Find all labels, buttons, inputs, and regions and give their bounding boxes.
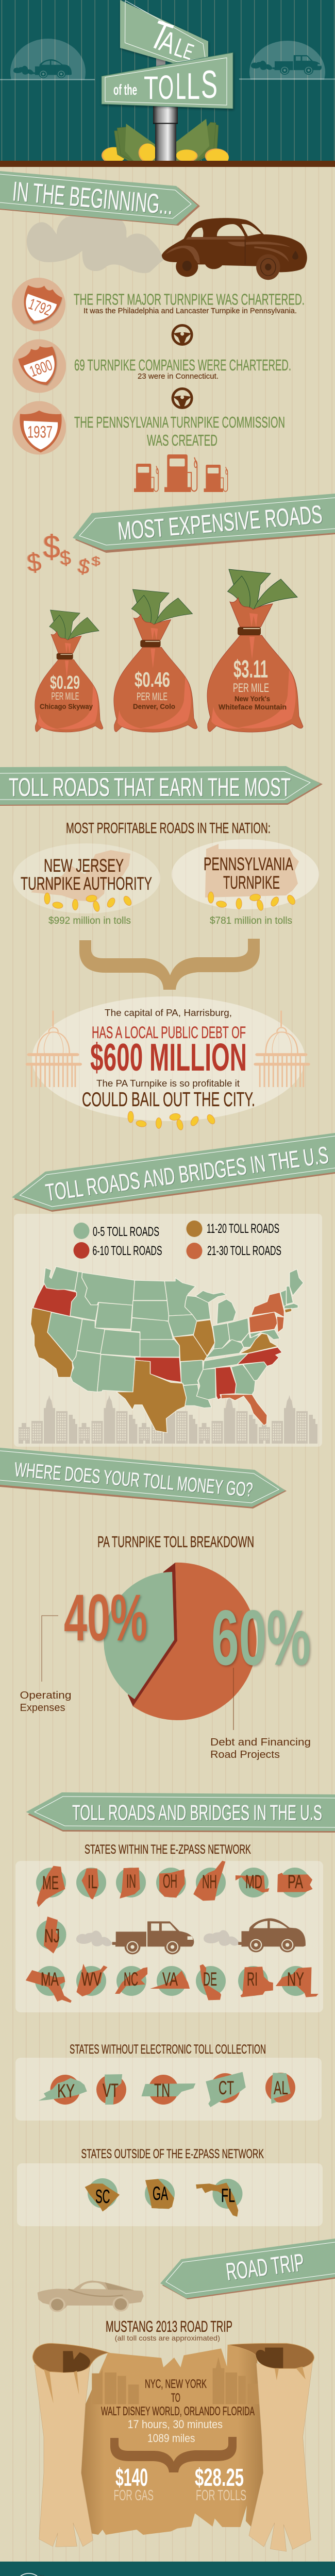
money bag: Chicago Skyway: Chicago Skyway bbox=[40, 702, 93, 710]
cost: gas: $140 bbox=[115, 2464, 148, 2492]
money bag: Denver: Denver, Colo bbox=[133, 702, 175, 710]
header panel bbox=[0, 0, 335, 166]
state labels: ME bbox=[42, 1872, 59, 1893]
icon: dollar signs: $ bbox=[26, 547, 43, 578]
state labels: PA bbox=[288, 1871, 303, 1892]
money bag: Whiteface Mountain: New York's bbox=[234, 694, 270, 703]
panel: outside states: GA bbox=[153, 2183, 168, 2204]
scroll text: route: TO bbox=[171, 2391, 180, 2405]
state labels: NH bbox=[202, 1871, 217, 1892]
icon: highway shield 1937 bbox=[12, 401, 66, 454]
icon: dollar signs: $ bbox=[92, 554, 100, 569]
icon: highway shield 1937: 1937 bbox=[27, 423, 53, 442]
panel: Harrisburg debt: The capital of PA, Harrisburg, bbox=[105, 1007, 232, 1018]
pie slice edge bbox=[128, 1563, 177, 1706]
icon: dollar signs: $ bbox=[43, 529, 60, 565]
icon: vintage brown car bbox=[162, 218, 307, 280]
scroll bbox=[32, 2343, 314, 2551]
banner: in the beginning: IN THE BEGINNING... bbox=[11, 176, 174, 221]
pie chart bbox=[20, 1563, 311, 1760]
leader: operating expenses bbox=[42, 1616, 58, 1682]
footer bbox=[0, 2562, 335, 2576]
street sign: of the TOLLS: T bbox=[144, 70, 158, 106]
cost: gas: FOR GAS bbox=[113, 2487, 154, 2504]
banner: road trip bbox=[160, 2239, 335, 2299]
icon: Pennsylvania map bbox=[205, 844, 299, 897]
state shapes bbox=[26, 1861, 319, 2003]
scroll text: route bbox=[101, 2377, 255, 2418]
label: operating expenses: Operating bbox=[20, 1690, 71, 1701]
scroll text: distance: 1089 miles bbox=[147, 2432, 195, 2445]
banner: toll roads that earn the most bbox=[0, 766, 323, 806]
money bag: Whiteface Mountain bbox=[207, 569, 303, 732]
fact detail: It was the Philadelphia and Lancaster Turnpike in Pennsylvania. bbox=[83, 307, 297, 315]
icon: gas pumps bbox=[134, 454, 228, 492]
map: United States bbox=[30, 1266, 304, 1433]
panel: Harrisburg debt bbox=[27, 996, 308, 1131]
panel: New Jersey Turnpike Authority: $992 million in tolls bbox=[48, 916, 131, 926]
street sign: TALE: E bbox=[180, 39, 196, 65]
label: debt and financing: Road Projects bbox=[210, 1749, 280, 1760]
icon: highway shield 1800 bbox=[12, 339, 66, 393]
street sign: of the TOLLS: O bbox=[158, 68, 174, 106]
panel: Pennsylvania Turnpike bbox=[172, 839, 319, 926]
icon: capitol right bbox=[256, 1011, 308, 1087]
state labels: NC bbox=[124, 1969, 138, 1990]
street sign: TALE bbox=[120, 0, 208, 65]
street sign: of the TOLLS: S bbox=[201, 63, 217, 107]
icon: brace bbox=[110, 2437, 237, 2472]
label: operating expenses bbox=[20, 1690, 71, 1714]
money bag: Chicago Skyway: PER MILE bbox=[52, 691, 79, 702]
state labels: NY bbox=[287, 1969, 304, 1990]
state labels: MA bbox=[41, 1969, 59, 1990]
scroll: left roll bbox=[32, 2343, 109, 2547]
state labels: IL bbox=[88, 1871, 97, 1892]
logo: CJ Pony Parts bbox=[14, 2573, 116, 2576]
icon: New Jersey map bbox=[31, 850, 130, 902]
panel: New Jersey Turnpike Authority bbox=[13, 843, 160, 926]
icon: money and coins at pole base bbox=[102, 119, 230, 166]
icon: highway shield 1800: 1800 bbox=[27, 357, 55, 380]
heading: mustang road trip: MUSTANG 2013 ROAD TRIP bbox=[106, 2317, 232, 2335]
money bag: Denver: $0.46 bbox=[135, 668, 170, 691]
panel: Pennsylvania Turnpike: TURNPIKE bbox=[223, 873, 280, 893]
panel: outside states: SC bbox=[95, 2186, 110, 2207]
icon: truck bbox=[76, 1921, 194, 1954]
icon: brace bbox=[79, 939, 260, 990]
street sign: of the TOLLS: of the bbox=[113, 82, 137, 98]
leader: debt and financing bbox=[233, 1668, 234, 1730]
icon: mustang bbox=[38, 2281, 144, 2312]
icon: capitol left bbox=[27, 1011, 80, 1087]
money bag: Whiteface Mountain: $3.11 bbox=[233, 656, 268, 683]
panel: outside states bbox=[17, 2163, 323, 2226]
street sign: of the TOLLS: L bbox=[187, 66, 200, 107]
street sign: of the TOLLS bbox=[102, 53, 233, 109]
money bag: Whiteface Mountain: PER MILE bbox=[233, 681, 269, 695]
panel: outside states: FL bbox=[221, 2185, 235, 2206]
panel: New Jersey Turnpike Authority: TURNPIKE AUTHORITY bbox=[21, 874, 152, 894]
label: operating expenses: Expenses bbox=[20, 1702, 65, 1714]
timeline: 1792 bbox=[12, 278, 305, 331]
street sign: TALE: A bbox=[156, 24, 180, 60]
timeline: 1937 bbox=[12, 401, 285, 454]
panel: New Jersey Turnpike Authority: NEW JERSEY bbox=[44, 856, 124, 876]
heading: states within e-zpass: STATES WITHIN THE E-ZPASS NETWORK bbox=[85, 1842, 251, 1857]
banner: toll roads and bridges e-zpass bbox=[26, 1792, 335, 1833]
subheading: approximated costs: (all toll costs are approximated) bbox=[115, 2334, 220, 2342]
scroll text: route: NYC, NEW YORK bbox=[145, 2377, 207, 2391]
icon: dollar signs bbox=[26, 529, 100, 579]
money bag: Denver: PER MILE bbox=[137, 691, 167, 703]
icon: dollar signs: $ bbox=[59, 547, 72, 570]
pie slice: 40 percent bbox=[104, 1572, 174, 1699]
panel: Harrisburg debt: The PA Turnpike is so profitable it bbox=[96, 1078, 240, 1089]
panel: non-electronic states: VT bbox=[103, 2080, 119, 2101]
state labels: VA bbox=[162, 1969, 178, 1990]
fact detail: 23 were in Connecticut. bbox=[138, 372, 219, 381]
legend: 11-20 TOLL ROADS bbox=[207, 1222, 279, 1236]
label: debt and financing: Debt and Financing bbox=[210, 1737, 311, 1748]
panel: non-electronic states: TN bbox=[154, 2080, 170, 2101]
panel: non-electronic states: AL bbox=[274, 2077, 288, 2098]
state labels: OH bbox=[163, 1871, 177, 1892]
timeline: 1800 bbox=[12, 339, 291, 393]
scroll: parchment centre bbox=[81, 2345, 263, 2535]
state labels: IN bbox=[126, 1871, 136, 1892]
pie slice: 60 percent bbox=[133, 1563, 257, 1720]
panel: e-zpass states bbox=[15, 1861, 323, 2012]
panel: non-electronic states: KY bbox=[57, 2080, 75, 2102]
state labels: MD bbox=[245, 1871, 262, 1892]
legend: 21-30 TOLL ROADS bbox=[207, 1244, 281, 1258]
panel: US map bbox=[14, 1214, 322, 1447]
cost: tolls: FOR TOLLS bbox=[196, 2487, 246, 2504]
state labels: RI bbox=[247, 1969, 258, 1990]
brown divider band bbox=[0, 161, 335, 167]
money bag: Chicago Skyway: $0.29 bbox=[50, 672, 80, 693]
skyline bbox=[19, 1395, 317, 1444]
icon: car bbox=[204, 1918, 306, 1952]
scroll: faded skyline bbox=[92, 2357, 260, 2404]
panel: non-electronic states bbox=[15, 2058, 322, 2121]
cost: tolls: $28.25 bbox=[195, 2464, 244, 2492]
icon: steering wheel bbox=[173, 388, 192, 408]
icon: steering wheel bbox=[173, 326, 192, 344]
money bag: Chicago Skyway bbox=[35, 610, 103, 732]
scroll: right roll bbox=[228, 2343, 314, 2551]
state circles bbox=[35, 1868, 311, 1996]
icon: car in bubble left bbox=[0, 39, 95, 80]
state labels: DE bbox=[203, 1969, 217, 1990]
state labels: NJ bbox=[44, 1925, 60, 1946]
street sign: TALE: L bbox=[171, 32, 190, 63]
value: 40 percent: 40% bbox=[64, 1581, 147, 1655]
money bag: Whiteface Mountain: Whiteface Mountain bbox=[219, 703, 287, 711]
icon: truck in bubble right bbox=[239, 41, 335, 80]
street sign: of the TOLLS: L bbox=[176, 66, 186, 107]
icon: exhaust smoke bbox=[27, 215, 163, 273]
panel: non-electronic states: CT bbox=[219, 2077, 234, 2098]
icon: highway shield 1792 bbox=[12, 278, 65, 331]
cost: tolls bbox=[195, 2464, 246, 2504]
legend bbox=[73, 1221, 281, 1259]
icon: dollar signs: $ bbox=[76, 555, 92, 579]
legend: 6-10 TOLL ROADS bbox=[93, 1244, 162, 1258]
legend: 0-5 TOLL ROADS bbox=[93, 1225, 159, 1239]
panel: Pennsylvania Turnpike: $781 million in tolls bbox=[210, 916, 292, 926]
fact continuation: WAS CREATED bbox=[147, 431, 217, 449]
banner: where does your toll money go bbox=[0, 1448, 287, 1509]
scroll text: duration: 17 hours, 30 minutes bbox=[128, 2418, 223, 2431]
state labels: WV bbox=[81, 1969, 102, 1990]
street sign: TALE: T bbox=[143, 12, 178, 59]
cost: gas bbox=[113, 2464, 154, 2504]
label: debt and financing bbox=[210, 1737, 311, 1760]
icon: highway shield 1792: 1792 bbox=[26, 296, 54, 319]
banner: in the beginning bbox=[0, 171, 200, 226]
money bag: Denver bbox=[114, 589, 197, 732]
signpost pole bbox=[153, 57, 178, 161]
panel: Harrisburg debt: HAS A LOCAL PUBLIC DEBT OF bbox=[92, 1023, 246, 1042]
state labels bbox=[41, 1871, 304, 1990]
